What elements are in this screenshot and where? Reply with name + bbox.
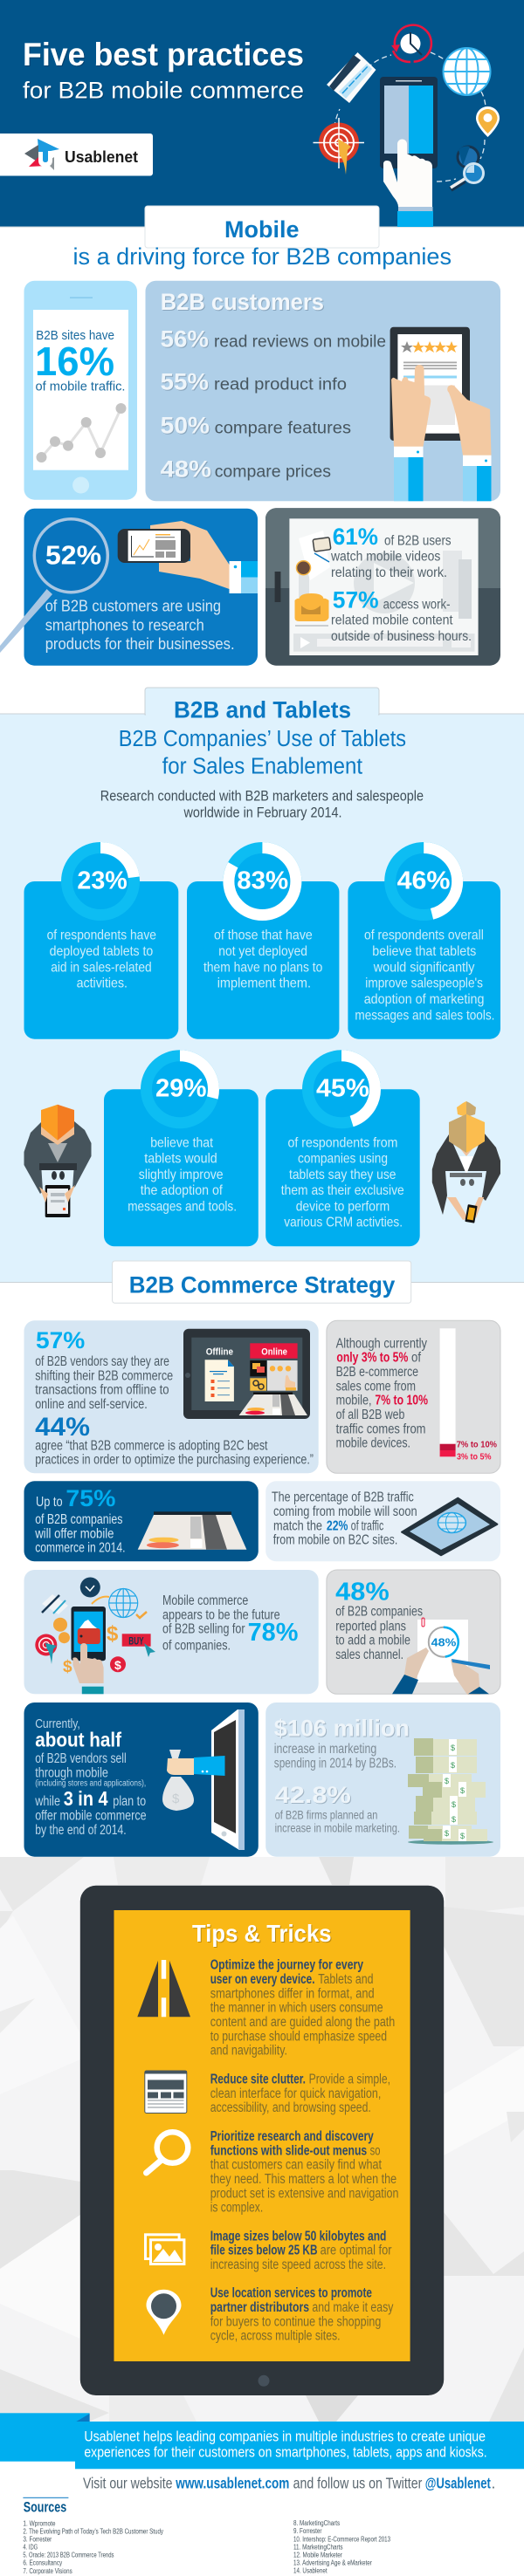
card: 23%: deployed tablets to bbox=[50, 944, 153, 959]
tip 5: Use location services to promote bbox=[210, 2286, 372, 2301]
stat: 56%: 56% bbox=[161, 325, 209, 352]
panel: 75% mobile commerce: of B2B companies bbox=[35, 1512, 123, 1527]
section heading: B2B and Tablets: B2B and Tablets bbox=[174, 697, 351, 723]
line chart bbox=[37, 403, 126, 462]
stat: 56%: read reviews on mobile bbox=[214, 332, 386, 351]
title: Five best practices bbox=[23, 37, 304, 72]
panel: 52% smartphones: products for their businesses. bbox=[45, 635, 235, 653]
panel: 22% traffic: of traffic bbox=[351, 1518, 383, 1533]
background: tips polygons bbox=[0, 1857, 524, 2422]
icon: stack of money: $ bbox=[445, 1829, 449, 1838]
stat: 61% bbox=[330, 524, 452, 580]
bar chart: 7% to 10% bbox=[457, 1440, 498, 1450]
panel: 3% to 5% sales: of all B2B web bbox=[336, 1408, 404, 1422]
stat: 57%: 57% bbox=[36, 1327, 85, 1353]
panel: about half: Currently, bbox=[35, 1716, 80, 1731]
card: 23%: activities. bbox=[77, 976, 128, 991]
panel: about half: (including stores and applications), bbox=[35, 1779, 146, 1789]
tip 3: so bbox=[370, 2143, 381, 2158]
sources: 6. Econsultancy bbox=[23, 2559, 62, 2567]
icon: credit card bbox=[327, 52, 376, 103]
panel: B2B customers bbox=[145, 281, 500, 501]
tip 5: for buyers to continue the shopping bbox=[210, 2314, 381, 2329]
tip 1: Tablets and bbox=[318, 1972, 374, 1987]
donut chart: 23%: 23% bbox=[77, 867, 128, 895]
panel: about half: plan to bbox=[113, 1794, 146, 1809]
tip 1: Optimize the journey for every bbox=[210, 1958, 363, 1973]
stat: 50%: 50% bbox=[161, 413, 210, 439]
card: 45%: device to perform bbox=[296, 1199, 390, 1214]
clock bbox=[80, 1578, 100, 1597]
panel: 3% to 5% sales: Although currently bbox=[336, 1336, 427, 1351]
icon: man with tablet bbox=[24, 1105, 91, 1217]
panel: about half: of B2B vendors sell bbox=[35, 1751, 127, 1766]
icon: woman with phone bbox=[432, 1101, 500, 1223]
tip 3: they need. This matters a lot when the bbox=[210, 2172, 396, 2187]
card: 83%: of those that have bbox=[214, 928, 313, 943]
donut chart: 83% bbox=[229, 848, 296, 915]
card: 23% bbox=[24, 848, 178, 1039]
icon: paper with hands bbox=[392, 1618, 490, 1695]
stat: 55% bbox=[161, 369, 347, 395]
section heading: B2B and Tablets bbox=[119, 697, 406, 779]
card: 23%: aid in sales-related bbox=[51, 960, 152, 975]
call to action: website and Twitter: and follow us on Twitter bbox=[293, 2475, 422, 2492]
tip 4: file sizes below 25 KB bbox=[210, 2244, 318, 2258]
sources: 4. IDG bbox=[23, 2544, 38, 2552]
panel: 22% traffic: The percentage of B2B traffic bbox=[272, 1490, 414, 1505]
icon: clock bbox=[391, 22, 434, 65]
card: 45%: them as their exclusive bbox=[281, 1183, 404, 1198]
panel: $106 million: spending in 2014 by B2Bs. bbox=[274, 1756, 396, 1771]
card: 46%: adoption of marketing bbox=[364, 992, 484, 1007]
sources: Sources bbox=[24, 2499, 66, 2516]
panel: 3% to 5% sales: mobile devices. bbox=[336, 1436, 410, 1451]
globe bbox=[109, 1588, 138, 1618]
banner: about Usablenet bbox=[0, 2413, 524, 2469]
icon: phone with commerce icons bbox=[35, 1578, 155, 1694]
tip 2: clean interface for quick navigation, bbox=[210, 2086, 381, 2101]
sources: 2. The Evolving Path of Today's Tech B2B Customer Study bbox=[23, 2527, 163, 2535]
panel: 52% smartphones: smartphones to research bbox=[45, 616, 204, 634]
section background: B2B and Tablets bbox=[0, 688, 524, 1283]
panel: 3% to 5% sales: 7% to 10% bbox=[375, 1394, 428, 1408]
icon: road bbox=[137, 1960, 190, 2017]
card: 45%: of respondents from bbox=[288, 1135, 397, 1150]
card: 29%: slightly improve bbox=[139, 1168, 224, 1182]
tip 4: are optimal for bbox=[321, 2244, 391, 2258]
tip 5 bbox=[210, 2286, 394, 2344]
icon: desk items bbox=[295, 531, 331, 627]
panel: about half: through mobile bbox=[35, 1765, 108, 1780]
panel: 78% future of selling: Mobile commerce bbox=[162, 1593, 248, 1608]
icon: phone with money bag: $ bbox=[172, 1792, 180, 1806]
icon: stack of money: $ bbox=[452, 1800, 456, 1809]
card: 45%: various CRM activties. bbox=[284, 1215, 403, 1230]
research note bbox=[100, 788, 424, 821]
tip 1: user on every device. bbox=[210, 1972, 314, 1987]
panel: 16% mobile traffic phone: 16% bbox=[35, 339, 114, 384]
stat: 44%: 44% bbox=[35, 1413, 90, 1442]
dashed ring bbox=[334, 52, 486, 182]
stat: 61%: 61% bbox=[333, 524, 378, 550]
donut chart: 29% bbox=[147, 1056, 213, 1123]
tip 4: increasing site speed across the site. bbox=[210, 2257, 386, 2272]
icon: stack of money: $ bbox=[451, 1744, 455, 1752]
stat: 57%: access work- bbox=[383, 598, 451, 613]
panel: 52% smartphones bbox=[0, 509, 258, 666]
sources: 7. Corporate Visions bbox=[23, 2567, 72, 2575]
tip 3: that customers can easily find what bbox=[210, 2158, 383, 2173]
panel: tablet with video stats bbox=[265, 508, 500, 666]
section heading: B2B and Tablets: B2B Companies’ Use of Tablets bbox=[119, 727, 406, 751]
tip 2: accessibility, and browsing speed. bbox=[210, 2100, 371, 2115]
call to action: website and Twitter: www.usablenet.com bbox=[176, 2475, 289, 2492]
panel: about half: offer mobile commerce bbox=[35, 1809, 147, 1824]
sources: 12. Mobile Marketer bbox=[293, 2551, 342, 2559]
sources: 5. Oracle: 2013 B2B Commerce Trends bbox=[23, 2552, 114, 2559]
donut chart: 45% bbox=[307, 1056, 376, 1123]
icon: magnifying glass bbox=[0, 519, 107, 653]
card: 45%: companies using bbox=[298, 1152, 388, 1167]
icon: stack of money: $ bbox=[460, 1786, 465, 1795]
stat: 61%: of B2B users bbox=[384, 533, 452, 548]
credit card bbox=[42, 1594, 68, 1614]
logo: Usablenet: Usablenet bbox=[65, 148, 138, 166]
panel: 22% traffic: match the bbox=[273, 1518, 322, 1533]
stat: 61%: watch mobile videos bbox=[330, 550, 441, 565]
panel: 75% mobile commerce: will offer mobile bbox=[34, 1526, 114, 1541]
panel: 48% sales channel: sales channel. bbox=[335, 1648, 403, 1662]
icon: phone with commerce icons: $ bbox=[114, 1658, 121, 1672]
icon: target bbox=[313, 118, 364, 175]
stat: 57% bbox=[331, 587, 472, 644]
title bbox=[23, 37, 304, 104]
tip 1: and navigability. bbox=[210, 2044, 287, 2059]
card: 46%: would significantly bbox=[373, 960, 474, 975]
card: 45% bbox=[265, 1056, 420, 1246]
panel: 78% future of selling bbox=[24, 1570, 319, 1694]
icon: map pin bbox=[476, 106, 500, 137]
stat: 50%: compare features bbox=[215, 419, 351, 438]
icon: offline online tablet: Offline bbox=[206, 1346, 233, 1357]
tip 1: content and are guided along the path bbox=[210, 2015, 395, 2030]
sources: 10. Intershop: E-Commerce Report 2013 bbox=[293, 2535, 390, 2543]
icon: site layout bbox=[145, 2071, 187, 2114]
icon: phone with commerce icons: $ bbox=[63, 1658, 72, 1676]
call to action: website and Twitter: @Usablenet bbox=[425, 2475, 491, 2492]
panel: 78% future of selling: appears to be the future bbox=[162, 1607, 280, 1622]
section heading: B2B Commerce Strategy bbox=[113, 1261, 411, 1303]
card: 45%: tablets say they use bbox=[289, 1168, 396, 1182]
donut chart: 83%: 83% bbox=[237, 867, 288, 895]
logo: Usablenet bbox=[0, 134, 153, 176]
section heading: Mobile: Mobile bbox=[224, 216, 299, 243]
tip 3: is complex. bbox=[210, 2201, 263, 2216]
icon: magnifier bbox=[451, 146, 484, 189]
header illustration: phone and icons bbox=[313, 22, 500, 227]
card: 46%: messages and sales tools. bbox=[355, 1008, 494, 1023]
panel: 16% mobile traffic phone: of mobile traffic. bbox=[35, 380, 126, 394]
tip 4: Image sizes below 50 kilobytes and bbox=[210, 2229, 386, 2244]
tip 1: smartphones differ in format, and bbox=[210, 1986, 375, 2001]
panel: 3% to 5% sales: sales come from bbox=[336, 1379, 416, 1394]
sources: 9. Forrester bbox=[293, 2527, 322, 2535]
tip 5: and make it easy bbox=[312, 2300, 394, 2315]
card: 46%: believe that tablets bbox=[372, 944, 476, 959]
bar chart: 3% to 5% bbox=[457, 1452, 492, 1463]
panel: 3% to 5% sales: B2B e-commerce bbox=[336, 1365, 418, 1380]
panel: about half: while bbox=[34, 1794, 60, 1809]
icon: images bbox=[145, 2235, 185, 2265]
tip 5: partner distributors bbox=[210, 2300, 309, 2315]
tip 3 bbox=[210, 2129, 398, 2216]
panel: 22% traffic: from mobile on B2C sites. bbox=[273, 1533, 397, 1548]
icon: pointing hand bbox=[383, 140, 433, 227]
panel: 48% sales channel: 48% bbox=[335, 1578, 390, 1606]
panel: 75% mobile commerce: 75% bbox=[66, 1485, 115, 1511]
research note: worldwide in February 2014. bbox=[183, 805, 342, 821]
panel: 22% traffic: coming from mobile will soon bbox=[273, 1504, 417, 1519]
panel: 48% sales channel: of B2B companies bbox=[335, 1605, 423, 1620]
donut chart: 29%: 29% bbox=[155, 1075, 207, 1103]
panel: 3% to 5% sales: mobile, bbox=[336, 1394, 372, 1408]
tip 1 bbox=[210, 1958, 395, 2059]
tip 2 bbox=[210, 2072, 390, 2115]
stat: 57%: transactions from offline to bbox=[35, 1383, 169, 1398]
donut chart: 23% bbox=[66, 848, 134, 915]
panel: 16% mobile traffic phone: B2B sites have bbox=[36, 329, 114, 343]
panel: about half: 3 in 4 bbox=[64, 1787, 108, 1810]
stat: 48% bbox=[161, 456, 331, 483]
panel: 48% sales channel bbox=[327, 1570, 500, 1695]
panel: 3% to 5% sales: of bbox=[411, 1351, 422, 1366]
stat: 48%: compare prices bbox=[215, 462, 331, 482]
sources: 11. MarketingCharts bbox=[293, 2543, 343, 2551]
phone bbox=[72, 1607, 106, 1661]
card: 29%: messages and tools. bbox=[128, 1199, 237, 1214]
header banner bbox=[0, 0, 524, 227]
card: 29%: tablets would bbox=[144, 1152, 217, 1167]
panel: 3% to 5% sales: traffic comes from bbox=[336, 1422, 426, 1436]
tip 3: Prioritize research and discovery bbox=[210, 2129, 374, 2144]
icon: location pin bbox=[147, 2290, 182, 2335]
icon: isometric tablet with globe bbox=[402, 1498, 497, 1555]
donut chart: 46% bbox=[390, 848, 458, 915]
panel: 48% sales channel: reported plans bbox=[335, 1619, 406, 1634]
stat: 57%: shifting their B2B commerce bbox=[35, 1368, 173, 1383]
card: 83%: implement them. bbox=[217, 976, 311, 991]
tip 1: to purchase should emphasize speed bbox=[210, 2029, 387, 2044]
sources: 1. Wpromote bbox=[23, 2519, 56, 2527]
call to action: website and Twitter: . bbox=[491, 2475, 495, 2492]
stat: 56% bbox=[161, 325, 386, 352]
panel: 75% mobile commerce bbox=[24, 1481, 259, 1561]
sources: 14. Usablenet bbox=[293, 2567, 328, 2575]
stat: 48%: 48% bbox=[161, 456, 211, 483]
panel: 52% smartphones: of B2B customers are using bbox=[45, 598, 221, 615]
panel: about half: about half bbox=[35, 1729, 121, 1751]
card: 46% bbox=[348, 848, 500, 1039]
panel: 48% sales channel: to add a mobile bbox=[335, 1634, 410, 1648]
panel: $106 million: $106 million bbox=[274, 1715, 410, 1741]
panel: 3% to 5% sales: only 3% to 5% bbox=[336, 1351, 408, 1366]
icon: phone with money bag bbox=[162, 1709, 245, 1850]
panel: tablet with tips bbox=[80, 1886, 444, 2395]
icon: magnifier bbox=[147, 2132, 188, 2173]
icon: stack of money: $ bbox=[451, 1761, 455, 1770]
card: 46%: improve salespeople's bbox=[365, 976, 483, 991]
section heading: B2B Commerce Strategy: B2B Commerce Strategy bbox=[129, 1272, 395, 1298]
call to action: website and Twitter bbox=[83, 2475, 495, 2492]
card: 29%: the adoption of bbox=[141, 1183, 223, 1198]
section heading: Mobile: is a driving force for B2B companies bbox=[73, 243, 452, 270]
sources bbox=[23, 2497, 390, 2575]
panel: 22% traffic bbox=[265, 1481, 500, 1561]
card: 46%: of respondents overall bbox=[364, 928, 484, 943]
sources: 3. Forrester bbox=[23, 2536, 52, 2544]
icon: globe bbox=[444, 48, 491, 95]
icon: paper with hands: 48% bbox=[431, 1636, 457, 1649]
stat: 55%: 55% bbox=[161, 369, 209, 395]
buy button: BUY bbox=[128, 1635, 144, 1648]
card: 29%: believe that bbox=[150, 1135, 213, 1150]
panel: $106 million: 42.8% bbox=[275, 1782, 351, 1808]
icon: stack of money: $ bbox=[445, 1777, 449, 1785]
icon: phone bbox=[380, 77, 438, 168]
title: for B2B mobile commerce bbox=[23, 78, 304, 104]
card: 29% bbox=[104, 1056, 259, 1246]
card: 83%: not yet deployed bbox=[218, 944, 307, 959]
bar chart bbox=[440, 1328, 498, 1463]
panel: $106 million: increase in marketing bbox=[274, 1742, 376, 1757]
stat: 44%: agree “that B2B commerce is adopting B2C best bbox=[35, 1438, 268, 1453]
panel: 78% future of selling: 78% bbox=[248, 1619, 299, 1647]
donut chart: 46%: 46% bbox=[397, 867, 451, 895]
icon: hand holding phone bbox=[118, 521, 258, 593]
stat: 57% bbox=[35, 1327, 173, 1412]
stat: 61%: relating to their work. bbox=[331, 565, 447, 580]
stat: 57%: outside of business hours. bbox=[331, 629, 472, 644]
sources: 13. Advertising Age & eMarketer bbox=[293, 2559, 372, 2566]
tip 2: Provide a simple, bbox=[309, 2072, 390, 2087]
stat: 50% bbox=[161, 413, 351, 439]
stat: 57%: online and self-service. bbox=[35, 1397, 148, 1412]
panel: 57% and 44% vendors bbox=[24, 1320, 319, 1473]
icon: stack of money: $ bbox=[452, 1815, 456, 1824]
panel: B2B customers: B2B customers bbox=[161, 289, 324, 315]
section heading: B2B and Tablets: for Sales Enablement bbox=[162, 755, 362, 779]
panel: $106 million: increase in mobile marketing. bbox=[275, 1820, 400, 1834]
icon: card terminal bbox=[138, 1511, 246, 1550]
tip 3: functions with slide-out menus bbox=[210, 2143, 367, 2158]
tip 1: the manner in which users consume bbox=[210, 2001, 383, 2016]
stat: 57%: related mobile content bbox=[331, 613, 453, 628]
panel: $106 million: of B2B firms planned an bbox=[275, 1808, 377, 1822]
tip 2: Reduce site clutter. bbox=[210, 2072, 306, 2087]
call to action: website and Twitter: Visit our website bbox=[83, 2475, 173, 2492]
icon: offline online tablet: Online bbox=[261, 1346, 287, 1357]
panel: about half: by the end of 2014. bbox=[35, 1823, 127, 1838]
icon: phone with commerce icons: $ bbox=[107, 1622, 119, 1646]
panel: about half bbox=[24, 1702, 259, 1857]
panel: 3% to 5% sales bbox=[327, 1320, 500, 1473]
target bbox=[35, 1634, 57, 1664]
panel: 52% smartphones: 52% bbox=[45, 540, 101, 571]
research note: Research conducted with B2B marketers and salespeople bbox=[100, 788, 424, 804]
card: 83%: them have no plans to bbox=[203, 960, 322, 975]
stat: 44% bbox=[35, 1413, 314, 1468]
heading: tips and tricks: Tips & Tricks bbox=[192, 1920, 332, 1947]
card: 83% bbox=[187, 848, 339, 1039]
panel: 75% mobile commerce: commerce in 2014. bbox=[35, 1541, 126, 1556]
tip 3: product set is extensive and navigation bbox=[210, 2186, 398, 2201]
donut chart: 45%: 45% bbox=[316, 1075, 369, 1103]
panel: 78% future of selling: of companies. bbox=[162, 1638, 231, 1653]
tip 5: cycle, across multiple sites. bbox=[210, 2329, 341, 2344]
panel: 75% mobile commerce: Up to bbox=[36, 1495, 63, 1510]
panel: 16% mobile traffic phone bbox=[24, 281, 137, 500]
stat: 55%: read product info bbox=[214, 375, 347, 394]
video player background bbox=[293, 551, 475, 652]
panel: 22% traffic: 22% bbox=[327, 1518, 348, 1533]
panel: 78% future of selling: of B2B selling for bbox=[162, 1622, 245, 1637]
section heading: Mobile bbox=[73, 206, 452, 270]
stat: 44%: practices in order to optimize the purchasing experience.” bbox=[35, 1453, 314, 1468]
icon: tablet with hands bbox=[390, 327, 491, 501]
sources: 8. MarketingCharts bbox=[293, 2519, 340, 2527]
panel: $106 million bbox=[265, 1702, 500, 1857]
card: 23%: of respondents have bbox=[47, 928, 156, 943]
icon: stack of money: $ bbox=[460, 1832, 465, 1840]
tip 4 bbox=[210, 2229, 391, 2272]
stat: 57%: of B2B vendors say they are bbox=[35, 1354, 169, 1369]
stat: 57%: 57% bbox=[333, 587, 379, 613]
icon: stack of money bbox=[408, 1738, 493, 1845]
hand bbox=[72, 1643, 104, 1694]
icon: offline online tablet bbox=[183, 1329, 310, 1419]
